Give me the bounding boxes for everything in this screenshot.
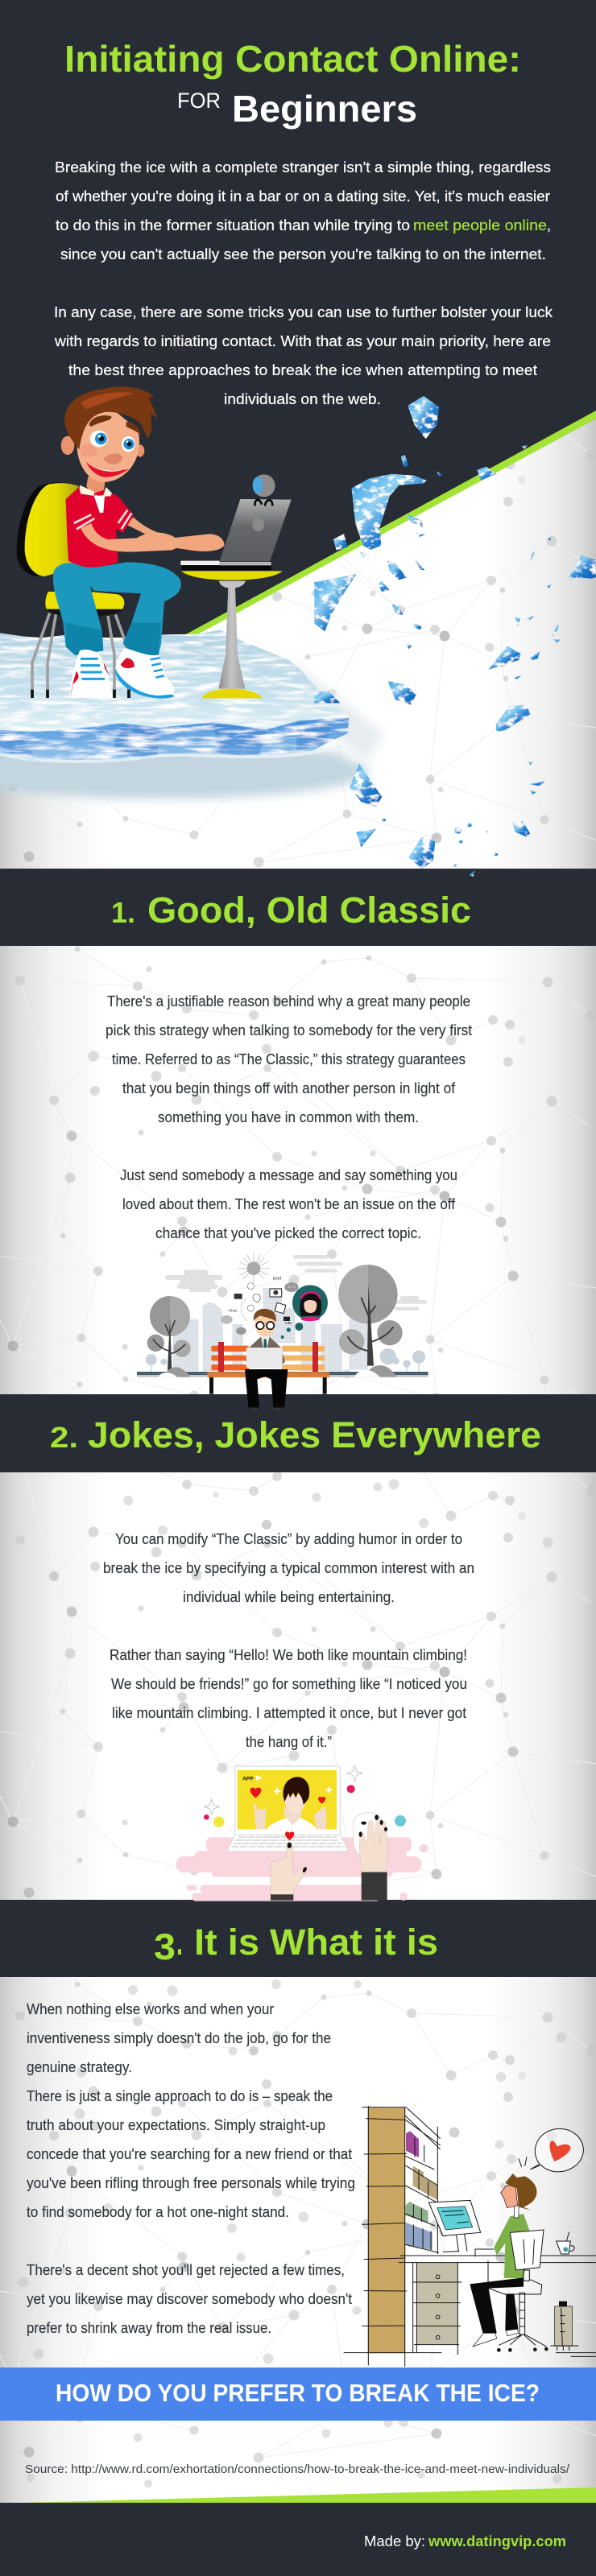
call to action band <box>0 2368 596 2421</box>
office desk illustration <box>344 2106 596 2367</box>
neck <box>86 477 106 499</box>
section 3 text: prefer to shrink away from the real issue. <box>27 2320 271 2336</box>
ground strip <box>137 1372 428 1377</box>
heading 1: Good, Old Classic <box>147 890 471 931</box>
man with laptop <box>245 1309 288 1411</box>
right shoe <box>115 648 175 699</box>
section 2 text: Rather than saying “Hello! We both like mountain climbing! <box>110 1647 467 1663</box>
hand on mouse <box>354 1813 388 1901</box>
park bench illustration <box>137 1253 428 1411</box>
chair <box>17 482 129 698</box>
bench back <box>207 1342 329 1394</box>
panel: section 1 <box>0 946 596 1428</box>
city buildings <box>173 1288 368 1371</box>
panel: section 3 <box>0 1977 596 2503</box>
red shirt <box>66 485 134 572</box>
social icons and chat labels: post <box>273 1276 282 1281</box>
laptop and hands illustration <box>176 1765 428 1901</box>
intro text: since you can't actually see the person you're talking to on the internet. <box>60 246 546 262</box>
social icons and chat labels <box>221 1276 303 1339</box>
section 1 text: There's a justifiable reason behind why a great many people <box>107 993 470 1009</box>
heading 3: 3 <box>154 1926 176 1967</box>
section 1 text: Just send somebody a message and say something you <box>120 1167 457 1183</box>
laptop with webcam <box>180 474 292 570</box>
desk and drawers <box>399 2249 596 2356</box>
footer with green stripe <box>0 2487 596 2576</box>
speech bubble with heart <box>519 2128 583 2172</box>
sun <box>238 1253 270 1284</box>
sparkles and flowers <box>204 1765 406 1827</box>
laptop table <box>181 571 283 698</box>
footer with green stripe: Made by: <box>364 2533 425 2549</box>
intro text: , <box>547 217 551 233</box>
woman avatar <box>292 1285 328 1321</box>
section 1 text: chance that you've picked the correct topic. <box>155 1225 421 1241</box>
source line: Source: http://www.rd.com/exhortation/connections/how-to-break-the-ice-and-meet-new-individuals/ <box>25 2462 570 2476</box>
clouds <box>165 1255 427 1311</box>
section 3 text: concede that you're searching for a new friend or that <box>27 2146 352 2162</box>
ice shards <box>314 396 596 877</box>
social icons and chat labels: Like <box>285 1320 292 1324</box>
head <box>61 386 158 482</box>
bookshelves <box>405 2107 441 2254</box>
small cabinet <box>550 2301 578 2351</box>
section 3 text <box>27 2001 355 2336</box>
intro text: meet people online <box>413 217 547 233</box>
heading 2: Jokes, Jokes Everywhere <box>88 1414 541 1455</box>
section 1 text: loved about them. The rest won't be an issue on the off <box>122 1196 456 1212</box>
call to action band: HOW DO YOU PREFER TO BREAK THE ICE? <box>56 2379 540 2407</box>
section 2 text: break the ice by specifying a typical common interest with an <box>103 1560 474 1576</box>
right arm <box>125 518 225 551</box>
person on screen <box>242 1775 333 1829</box>
section 3 text: There is just a single approach to do is – speak the <box>27 2088 333 2104</box>
bookcase side <box>344 2106 441 2367</box>
intro text: with regards to initiating contact. With that as your main priority, here are <box>54 333 551 349</box>
jeans <box>53 562 181 655</box>
left tree <box>147 1296 191 1370</box>
ice floe <box>0 630 384 799</box>
intro text: individuals on the web. <box>224 391 381 407</box>
section 1 text: time. Referred to as “The Classic,” this strategy guarantees <box>112 1051 466 1067</box>
section 3 text: genuine strategy. <box>27 2059 132 2075</box>
section 2 text: We should be friends!” go for something like “I noticed you <box>111 1676 467 1692</box>
heading 3: It is What it is <box>194 1922 438 1963</box>
section 2 text <box>103 1531 474 1750</box>
heading 1: 1. <box>111 896 135 929</box>
section 2 text: You can modify “The Classic” by adding humor in order to <box>115 1531 462 1547</box>
pointing hand <box>271 1831 308 1901</box>
section 1 text <box>106 993 472 1241</box>
heading 3: . <box>176 1922 183 1963</box>
person on screen: APP <box>242 1776 254 1781</box>
pink brush strokes <box>176 1837 428 1901</box>
bushes <box>159 1365 397 1377</box>
title: FOR <box>177 89 221 113</box>
title: Initiating Contact Online: <box>64 38 521 80</box>
coffee cup <box>557 2232 574 2254</box>
intro text <box>54 159 553 407</box>
intro text: Breaking the ice with a complete stranger isn't a simple thing, regardless <box>55 159 551 175</box>
background small trees <box>146 1348 425 1372</box>
footer with green stripe: www.datingvip.com <box>428 2533 566 2549</box>
section 3 text: yet you likewise may discover somebody who doesn't <box>27 2291 352 2307</box>
section 3 text: truth about your expectations. Simply straight-up <box>27 2117 325 2133</box>
section 3 text: There's a decent shot you'll get rejected a few times, <box>27 2262 345 2278</box>
office chair <box>489 2230 548 2352</box>
seated person <box>470 2174 536 2347</box>
intro text: the best three approaches to break the ice when attempting to meet <box>68 362 537 378</box>
social icons and chat labels: Chat <box>228 1308 237 1313</box>
left arm <box>81 523 179 552</box>
section 2 text: like mountain climbing. I attempted it once, but I never got <box>112 1705 466 1721</box>
intro text: In any case, there are some tricks you can use to further bolster your luck <box>54 304 553 320</box>
monitor <box>428 2200 481 2252</box>
section 3 text: When nothing else works and when your <box>27 2001 274 2017</box>
intro text: of whether you're doing it in a bar or on a dating site. Yet, it's much easier <box>56 188 550 204</box>
section 3 text: you've been rifling through free personals while trying <box>27 2175 355 2191</box>
left shoe <box>69 650 113 698</box>
laptop <box>228 1766 348 1852</box>
title <box>64 38 521 130</box>
section 3 text: inventiveness simply doesn't do the job, go for the <box>27 2030 331 2046</box>
section 3 text: to find somebody for a hot one-night stand. <box>27 2204 289 2220</box>
section 1 text: that you begin things off with another person in light of <box>122 1080 456 1096</box>
section 1 text: pick this strategy when talking to somebody for the very first <box>106 1022 472 1038</box>
right tree <box>338 1265 403 1366</box>
title: Beginners <box>232 88 417 130</box>
panel: section 2 <box>0 1472 596 1900</box>
section 2 text: the hang of it.” <box>246 1734 332 1750</box>
boy at laptop illustration <box>17 386 292 699</box>
intro text: to do this in the former situation than while trying to <box>56 217 410 233</box>
heading 2: 2. <box>50 1421 78 1454</box>
section 2 text: individual while being entertaining. <box>183 1589 395 1605</box>
section 1 text: something you have in common with them. <box>158 1109 419 1125</box>
hero white panel with network <box>0 386 596 869</box>
